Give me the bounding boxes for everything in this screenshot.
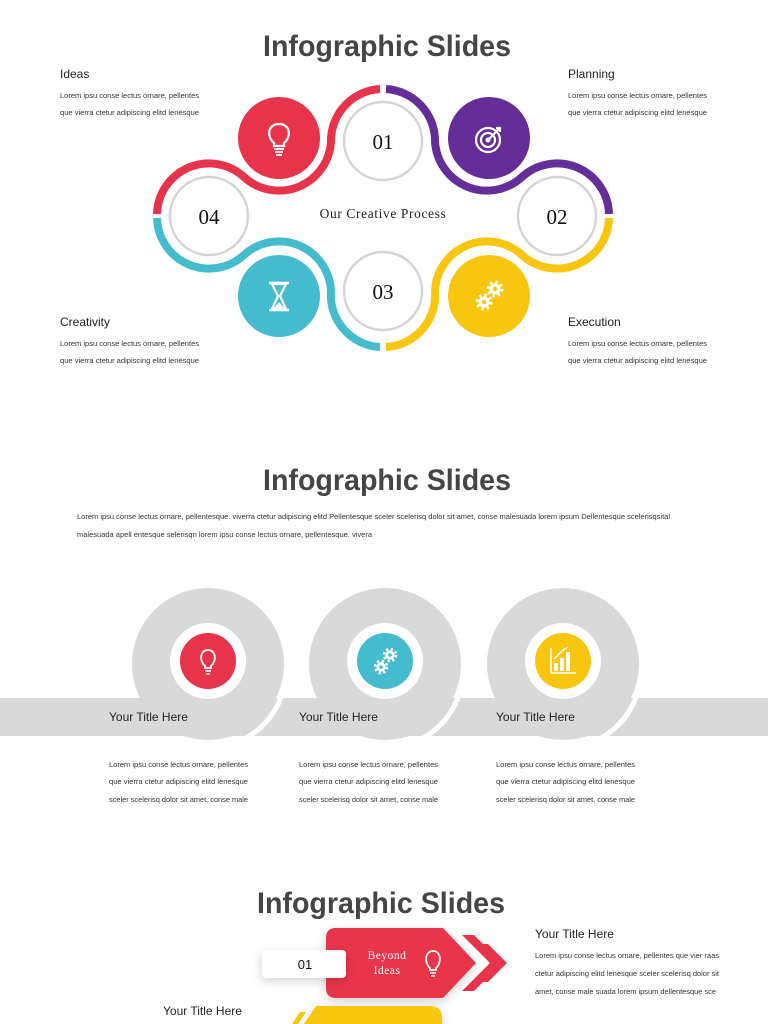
text block: step 01: Your Title Here — [535, 927, 614, 941]
text block: execution: que vierra ctetur adipiscing elitd lenesque — [568, 356, 707, 365]
title 2: Infographic Slides — [263, 464, 511, 497]
text column 2 — [299, 760, 438, 804]
spiral 2 — [309, 588, 463, 740]
process diagram — [157, 89, 609, 347]
step 02 tag — [292, 1006, 442, 1024]
spiral band diagram — [0, 588, 768, 740]
icon: target purple — [448, 97, 530, 179]
text block: ideas: Lorem ipsu conse lectus ornare, pellentes — [60, 91, 199, 100]
number circle 02 — [518, 177, 596, 255]
text column 3 — [496, 760, 635, 804]
text block: step 01: Lorem ipsu conse lectus ornare, pellentes que vier raas — [535, 951, 719, 960]
text column 1: Lorem ipsu conse lectus ornare, pellentes — [109, 760, 248, 769]
text block: step 02 title: Your Title Here — [163, 1004, 242, 1018]
text column 1: que vierra ctetur adipiscing elitd lenesque — [109, 777, 248, 786]
text block: creativity: Lorem ipsu conse lectus ornare, pellentes — [60, 339, 199, 348]
text block: ideas: que vierra ctetur adipiscing elitd lenesque — [60, 108, 199, 117]
paragraph 2: Lorem ipsu conse lectus ornare, pellentesque. viverra ctetur adipiscing elitd Pellentesque sceler scelerisq dolor sit amet, conse malesuada lorem ipsum Dellentesque scelerisqsital — [77, 512, 670, 521]
paragraph 2: malesuada apell entesque selerisqn lorem ipsu conse lectus ornare, pellentesque. vivera — [77, 530, 372, 539]
title 1: Infographic Slides — [263, 30, 511, 63]
text block: ideas — [60, 67, 199, 117]
step 01 tag: Ideas — [374, 965, 400, 977]
spiral band diagram: Your Title Here — [496, 710, 575, 724]
step 01 tag — [262, 928, 507, 998]
number circle 04 — [170, 177, 248, 255]
text block: step 01 — [535, 927, 719, 996]
icon: hourglass teal — [238, 255, 320, 337]
number circle 01 — [344, 102, 422, 180]
text column 1: sceler scelerisq dolor sit amet, conse male — [109, 795, 248, 804]
text block: planning: que vierra ctetur adipiscing elitd lenesque — [568, 108, 707, 117]
number circle 04: 04 — [198, 205, 220, 229]
text block: planning: Lorem ipsu conse lectus ornare, pellentes — [568, 91, 707, 100]
text block: execution: Execution — [568, 315, 621, 329]
text block: step 01: amet, conse male suada lorem ipsum dellentesque sce — [535, 987, 716, 996]
number circle 01: 01 — [372, 130, 394, 154]
icon: gears yellow — [448, 255, 530, 337]
step 01 tag: Beyond — [368, 950, 406, 962]
band: teal — [157, 218, 380, 347]
text block: creativity: que vierra ctetur adipiscing elitd lenesque — [60, 356, 199, 365]
text block: execution — [568, 315, 707, 365]
paragraph 2 — [77, 512, 670, 539]
text block: step 01: ctetur adipiscing elitd lenesque sceler scelerisq dolor sit — [535, 969, 719, 978]
text column 1 — [109, 760, 248, 804]
text block: planning — [568, 67, 707, 117]
spiral 1 — [132, 588, 286, 740]
text block: creativity — [60, 315, 199, 365]
text column 3: que vierra ctetur adipiscing elitd lenesque — [496, 777, 635, 786]
text column 3: Lorem ipsu conse lectus ornare, pellentes — [496, 760, 635, 769]
band: purple — [386, 89, 609, 214]
text column 2: Lorem ipsu conse lectus ornare, pellentes — [299, 760, 438, 769]
band: yellow — [386, 218, 609, 347]
title 3: Infographic Slides — [257, 887, 505, 920]
number circle 03 — [344, 252, 422, 330]
text block: creativity: Creativity — [60, 315, 110, 329]
text block: planning: Planning — [568, 67, 615, 81]
spiral 3 — [487, 588, 641, 740]
text column 3: sceler scelerisq dolor sit amet, conse male — [496, 795, 635, 804]
icon: lightbulb red — [238, 97, 320, 179]
number circle 03: 03 — [372, 280, 394, 304]
step 01 tag: 01 — [298, 957, 312, 972]
spiral band diagram: Your Title Here — [299, 710, 378, 724]
center label: Our Creative Process — [320, 206, 446, 221]
band: red — [157, 89, 380, 214]
text column 2: que vierra ctetur adipiscing elitd lenesque — [299, 777, 438, 786]
text block: execution: Lorem ipsu conse lectus ornare, pellentes — [568, 339, 707, 348]
card titles: Your Title Here — [109, 710, 188, 724]
number circle 02: 02 — [546, 205, 568, 229]
text block: ideas: Ideas — [60, 67, 89, 81]
text column 2: sceler scelerisq dolor sit amet, conse male — [299, 795, 438, 804]
